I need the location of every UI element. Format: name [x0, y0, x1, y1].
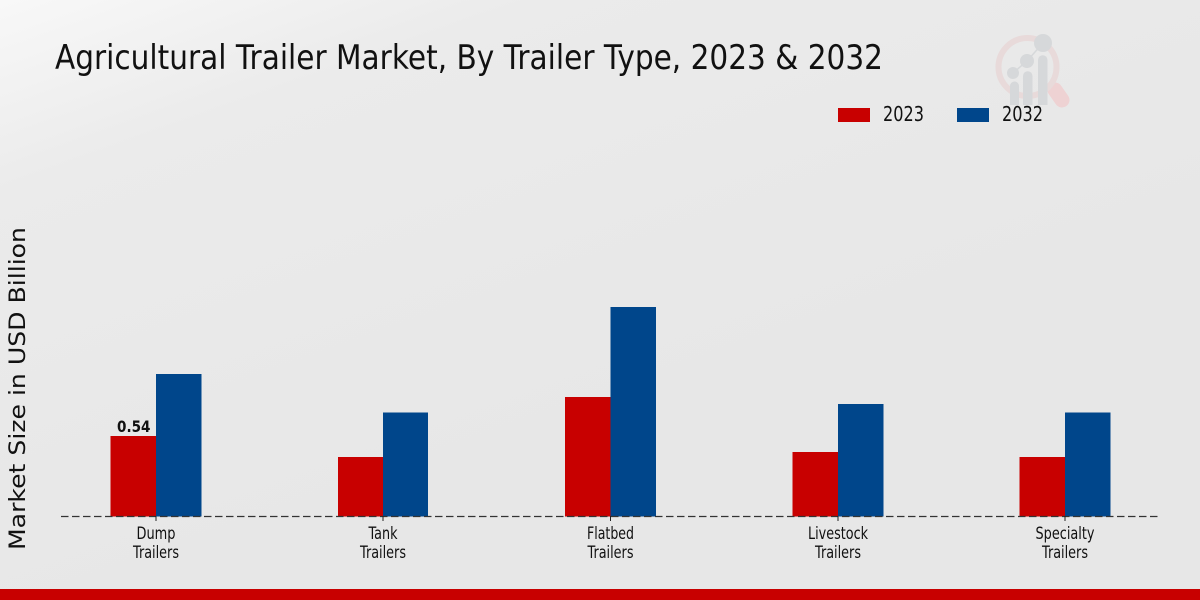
- bar chart: [61, 307, 1160, 562]
- title: Agricultural Trailer Market, By Trailer Type, 2023 & 2032: [55, 38, 883, 78]
- legend: 2023: [838, 102, 924, 126]
- category label: Dump Trailers: [132, 524, 179, 562]
- category label: Tank Trailers: [359, 524, 406, 562]
- legend: 2032: 2032: [1002, 102, 1043, 126]
- bars: Dump Trailers: [110, 374, 202, 516]
- footer bar: [0, 589, 1200, 600]
- category label: Flatbed Trailers: Flatbed: [587, 524, 634, 543]
- legend: 2023: 2023: [883, 102, 924, 126]
- category label: Specialty Trailers: Trailers: [1041, 543, 1088, 562]
- category label: Specialty Trailers: Specialty: [1036, 524, 1095, 543]
- category label: Dump Trailers: Dump: [136, 524, 176, 543]
- category label: Flatbed Trailers: Trailers: [587, 543, 634, 562]
- bars: Flatbed Trailers: [565, 307, 656, 516]
- category label: Livestock Trailers: Trailers: [814, 543, 861, 562]
- category label: Tank Trailers: Trailers: [359, 543, 406, 562]
- y axis title: Market Size in USD Billion: [5, 227, 31, 550]
- category label: Specialty Trailers: [1036, 524, 1095, 562]
- icon: watermark logo: [998, 34, 1062, 105]
- legend: [838, 102, 1043, 126]
- bars: Livestock Trailers: [792, 404, 884, 516]
- bars: Tank Trailers: [338, 412, 428, 516]
- category label: Tank Trailers: Tank: [368, 524, 398, 543]
- category label: Dump Trailers: Trailers: [132, 543, 179, 562]
- category label: Livestock Trailers: Livestock: [808, 524, 868, 543]
- legend: 2032: [957, 102, 1043, 126]
- category label: Flatbed Trailers: [587, 524, 634, 562]
- bars: Specialty Trailers: [1020, 412, 1110, 516]
- category label: Livestock Trailers: [808, 524, 868, 562]
- data label: 0.54: 0.54: [117, 417, 150, 436]
